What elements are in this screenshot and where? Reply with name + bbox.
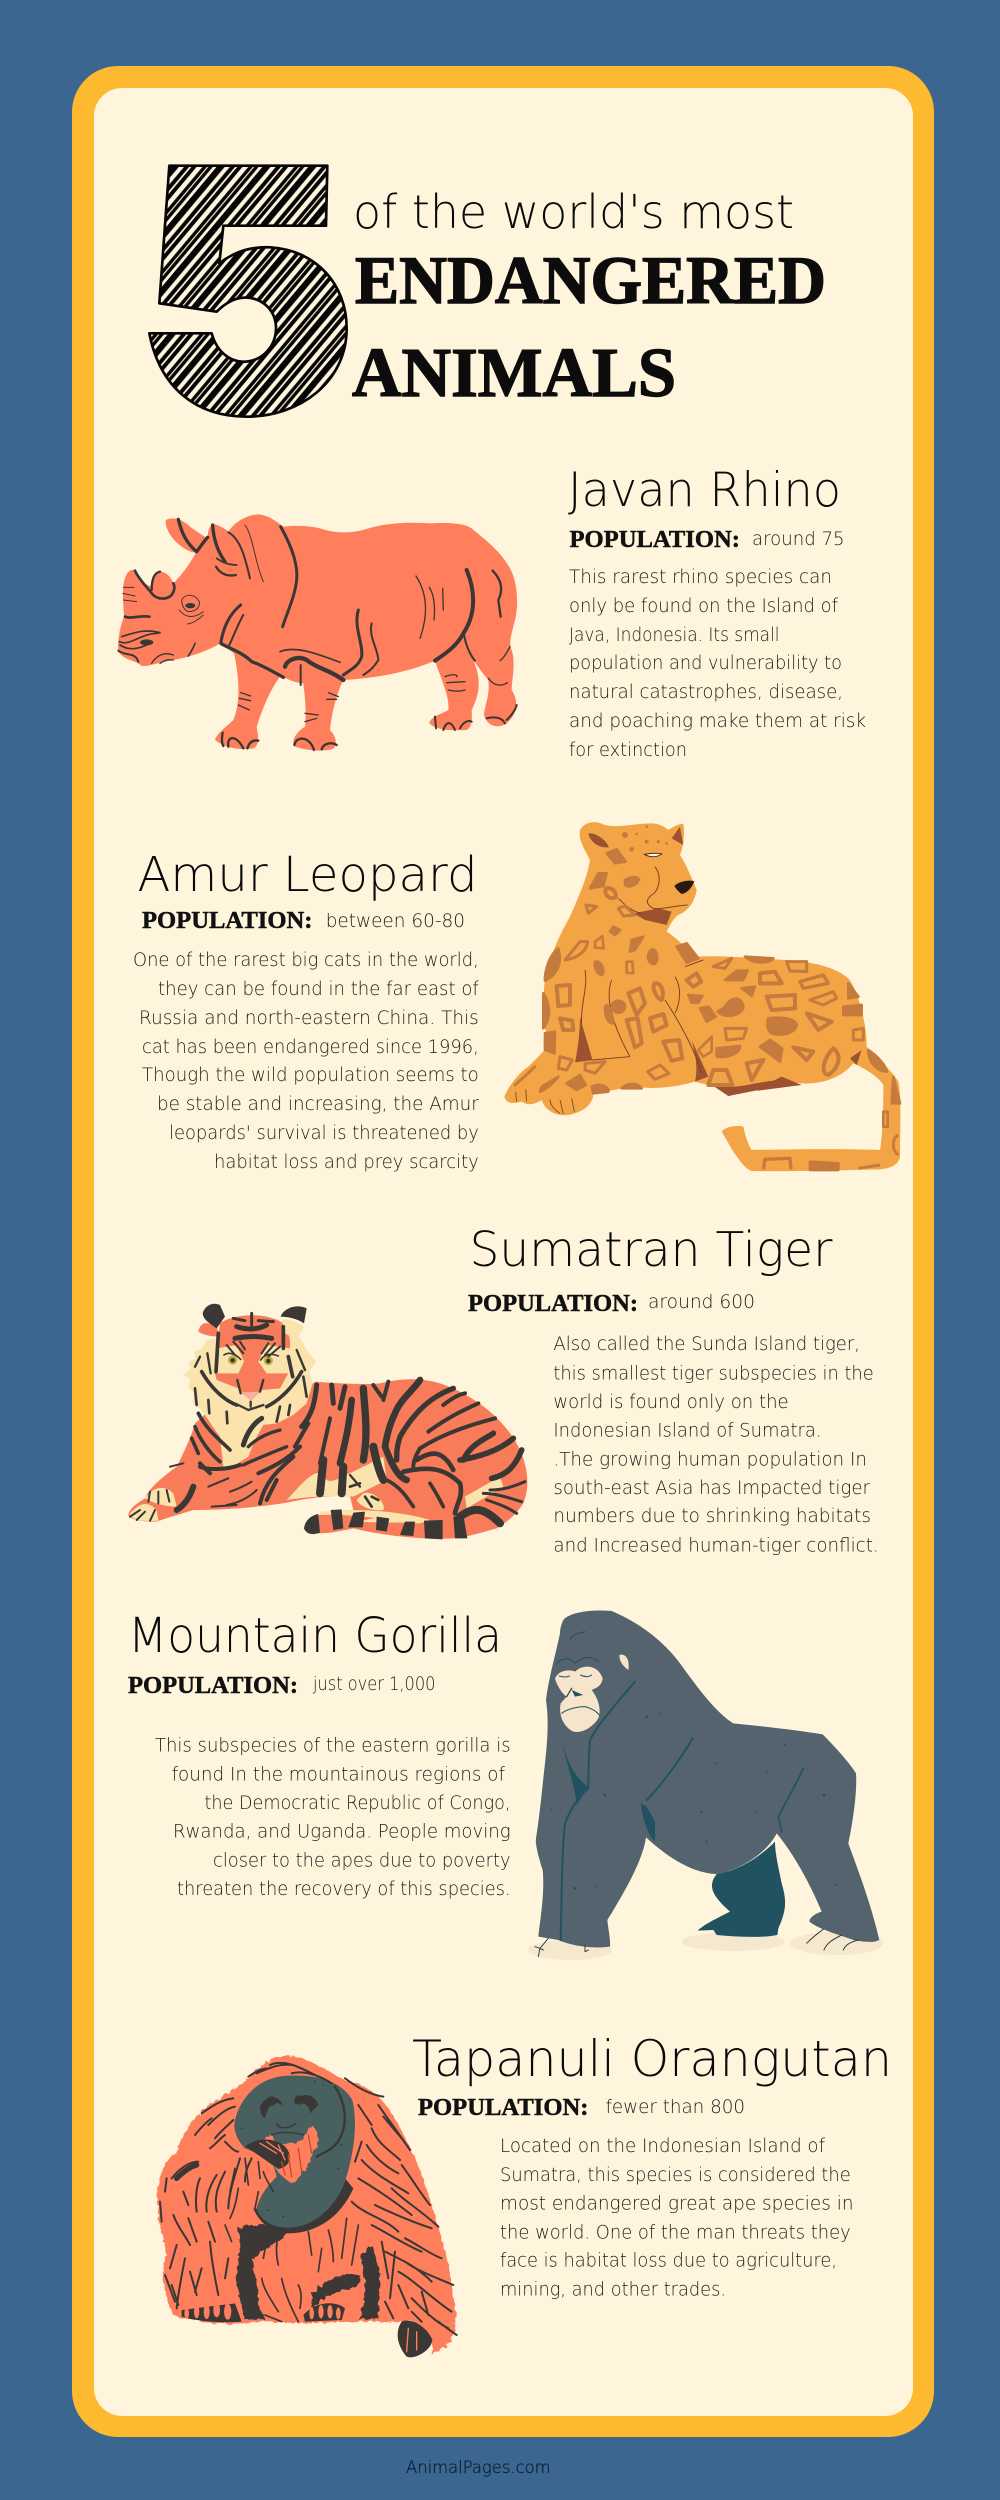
- text block: This subspecies of the eastern gorilla is: [155, 1735, 511, 1756]
- panel: Tapanuli Orangutan: [157, 2030, 892, 2357]
- text block: Java, Indonesia. Its small: [569, 625, 780, 646]
- panel: Javan Rhino: [118, 463, 866, 761]
- heading: Sumatran Tiger: [470, 1222, 833, 1278]
- text block: for extinction: [569, 740, 687, 761]
- heading: Mountain Gorilla: [128, 1608, 502, 1664]
- text block: world is found only on the: [553, 1392, 789, 1413]
- population value: just over 1,000: [312, 1673, 436, 1695]
- text block: Indonesian Island of Sumatra.: [553, 1421, 822, 1442]
- panel: Amur Leopard: [133, 822, 900, 1173]
- text block: This rarest rhino species can: [569, 567, 832, 588]
- panel: Sumatran Tiger: [128, 1222, 879, 1556]
- text block: most endangered great ape species in: [500, 2194, 854, 2215]
- title line 1: of the world's most: [353, 185, 794, 239]
- text block: closer to the apes due to poverty: [213, 1850, 511, 1871]
- text block: Sumatra, this species is considered the: [500, 2165, 851, 2186]
- text block: Also called the Sunda Island tiger,: [553, 1334, 860, 1355]
- text block: [133, 950, 479, 1173]
- footer credit: AnimalPages.com: [406, 2458, 551, 2478]
- population value: between 60-80: [326, 910, 465, 932]
- population label: POPULATION:: [142, 908, 312, 934]
- text block: One of the rarest big cats in the world,: [133, 950, 479, 971]
- text block: [500, 2136, 854, 2300]
- text block: cat has been endangered since 1996,: [142, 1037, 479, 1058]
- population label: POPULATION:: [128, 1673, 298, 1699]
- population value: around 75: [752, 528, 844, 550]
- text block: face is habitat loss due to agriculture,: [500, 2251, 837, 2272]
- text block: threaten the recovery of this species.: [177, 1879, 511, 1900]
- icon: rhino: [118, 514, 517, 751]
- population label: POPULATION:: [418, 2095, 588, 2121]
- text block: Rwanda, and Uganda. People moving: [173, 1822, 511, 1843]
- icon: leopard: [504, 822, 900, 1171]
- population value: around 600: [648, 1291, 755, 1313]
- text block: the Democratic Republic of Congo,: [204, 1793, 510, 1814]
- panel: Mountain Gorilla: [128, 1608, 883, 1960]
- text block: this smallest tiger subspecies in the: [553, 1364, 874, 1384]
- icon: gorilla: [528, 1610, 883, 1960]
- icon: hatched number 5: [149, 166, 347, 417]
- text block: Located on the Indonesian Island of: [500, 2136, 825, 2157]
- population label: POPULATION:: [570, 527, 740, 553]
- text block: only be found on the Island of: [569, 596, 838, 617]
- text block: and Increased human-tiger conflict.: [553, 1535, 879, 1556]
- text block: numbers due to shrinking habitats: [553, 1506, 871, 1527]
- heading: Javan Rhino: [568, 463, 841, 518]
- icon: tiger: [128, 1304, 527, 1539]
- text block: [155, 1735, 511, 1900]
- text block: and poaching make them at risk: [569, 711, 866, 732]
- text block: south-east Asia has Impacted tiger: [553, 1478, 870, 1499]
- icon: orangutan: [157, 2056, 457, 2357]
- text block: habitat loss and prey scarcity: [214, 1152, 479, 1173]
- text block: leopards' survival is threatened by: [169, 1123, 479, 1144]
- text block: natural catastrophes, disease,: [569, 682, 843, 703]
- text block: population and vulnerability to: [569, 653, 842, 674]
- text block: mining, and other trades.: [500, 2279, 726, 2300]
- text block: the world. One of the man threats they: [500, 2222, 851, 2244]
- population label: POPULATION:: [468, 1291, 638, 1317]
- title block: [149, 166, 826, 417]
- text block: [553, 1334, 879, 1556]
- text block: found In the mountainous regions of: [172, 1765, 505, 1786]
- text block: Though the wild population seems to: [142, 1065, 479, 1086]
- text block: be stable and increasing, the Amur: [157, 1094, 479, 1115]
- panel: cream card: [94, 88, 913, 2416]
- text block: .The growing human population In: [553, 1450, 867, 1471]
- text block: they can be found in the far east of: [158, 979, 479, 1000]
- title line 3: ANIMALS: [352, 335, 676, 412]
- tail stripes: [320, 1510, 430, 1523]
- text block: [569, 567, 866, 761]
- title line 2: ENDANGERED: [355, 242, 826, 318]
- heading: Tapanuli Orangutan: [412, 2030, 892, 2088]
- population value: fewer than 800: [606, 2096, 745, 2118]
- text block: Russia and north-eastern China. This: [139, 1008, 479, 1029]
- heading: Amur Leopard: [138, 847, 478, 903]
